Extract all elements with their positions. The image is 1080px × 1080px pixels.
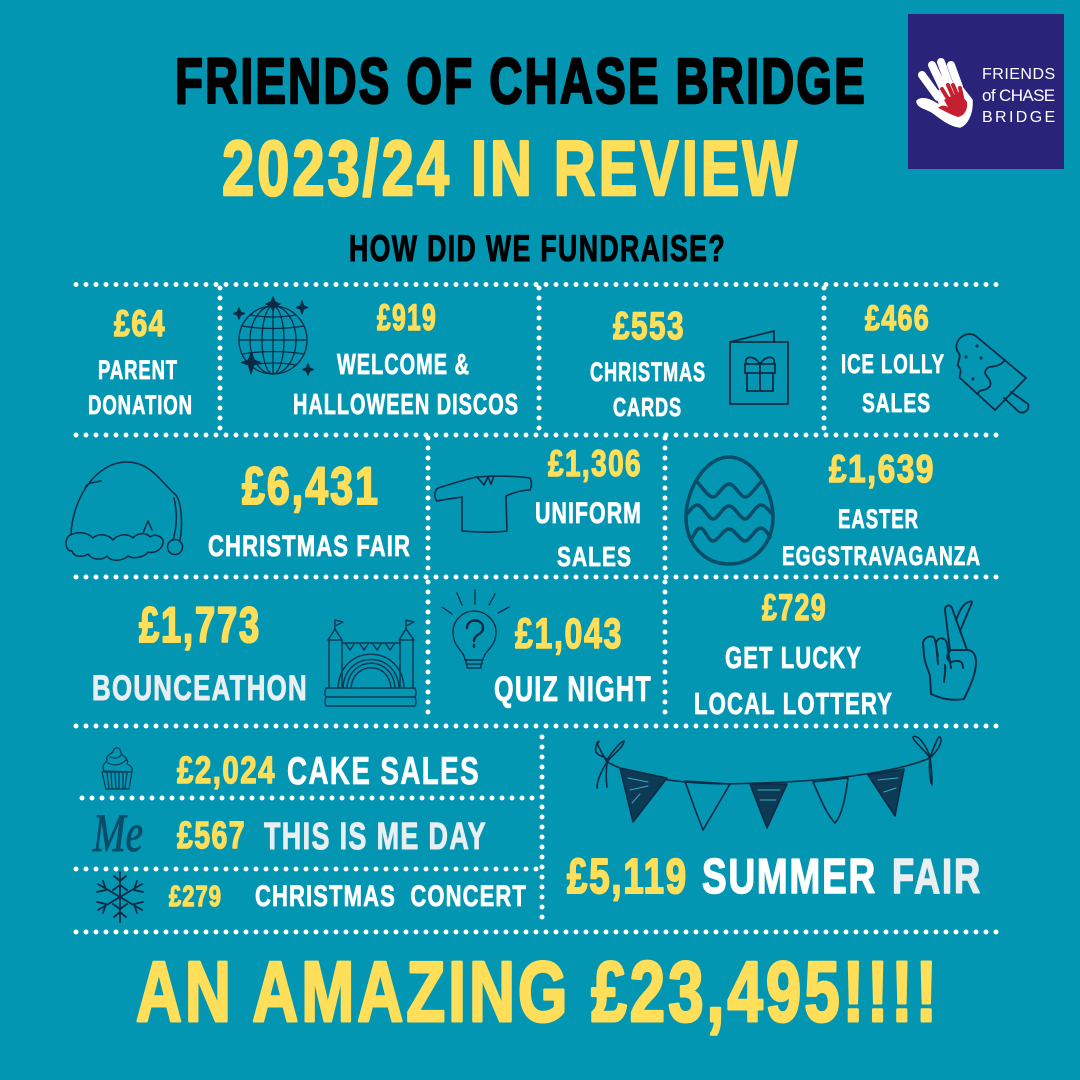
panel: this is me day: £567	[177, 815, 246, 857]
panel: christmas concert	[97, 872, 527, 922]
panel: summer fair: SUMMER	[702, 850, 877, 904]
icon: me script: Me	[92, 803, 143, 863]
panel: uniform sales: SALES	[557, 541, 632, 572]
panel: ice lolly sales: SALES	[862, 388, 931, 418]
panel: christmas fair: £6,431	[242, 457, 380, 516]
logo text: of CHASE	[982, 86, 1056, 105]
icon: snowflake	[97, 872, 143, 922]
panel: ice lolly sales: £466	[865, 299, 930, 338]
panel: uniform sales: UNIFORM	[535, 497, 642, 530]
panel: easter eggstravaganza: EASTER	[838, 504, 919, 534]
panel: easter eggstravaganza: EGGSTRAVAGANZA	[782, 541, 981, 571]
icon: easter egg	[686, 457, 773, 564]
panel: bounceathon: BOUNCEATHON	[92, 669, 308, 708]
panel: cake sales: £2,024	[177, 750, 276, 792]
panel: easter eggstravaganza	[686, 448, 981, 571]
panel: discos: WELCOME &	[337, 349, 470, 381]
panel: uniform sales: £1,306	[548, 443, 642, 484]
panel: parent donation	[88, 303, 193, 420]
panel: parent donation: DONATION	[88, 390, 193, 420]
icon: ice lolly	[956, 334, 1028, 413]
panel: christmas cards: CARDS	[613, 392, 682, 422]
panel: christmas fair	[66, 457, 411, 563]
panel: bounceathon: £1,773	[139, 597, 261, 653]
panel: this is me day: THIS IS ME DAY	[264, 816, 487, 858]
panel: uniform sales	[435, 443, 642, 572]
panel: discos: HALLOWEEN DISCOS	[293, 389, 519, 421]
panel: local lottery: LOCAL LOTTERY	[694, 686, 893, 721]
panel: parent donation: £64	[114, 303, 166, 344]
logo text	[982, 66, 1056, 126]
panel: quiz night: £1,043	[515, 610, 623, 658]
panel: discos	[234, 297, 519, 421]
panel: christmas cards: £553	[613, 305, 685, 348]
panel: christmas concert: CHRISTMAS CONCERT	[255, 880, 527, 913]
logo text: FRIENDS	[982, 66, 1056, 83]
icon: crossed fingers	[923, 601, 976, 700]
panel: christmas concert: £279	[169, 881, 222, 913]
icon: bouncy castle	[325, 620, 416, 706]
panel: bounceathon	[92, 597, 416, 708]
icon: gift card	[730, 331, 788, 404]
icon: cupcake	[102, 748, 132, 789]
panel: ice lolly sales	[841, 299, 1028, 418]
panel: ice lolly sales: ICE LOLLY	[841, 349, 945, 379]
section heading: HOW DID WE FUNDRAISE?	[349, 228, 726, 269]
icon: bunting	[596, 737, 941, 830]
panel: quiz night	[442, 590, 652, 709]
icon: sweater	[435, 476, 532, 532]
icon: white hand	[917, 62, 972, 127]
panel: discos: £919	[377, 297, 437, 338]
panel: parent donation: PARENT	[98, 355, 178, 385]
panel: christmas cards	[590, 305, 788, 422]
panel: quiz night: QUIZ NIGHT	[494, 670, 652, 709]
panel: local lottery	[694, 587, 976, 721]
logo	[908, 14, 1064, 169]
panel: local lottery: GET LUCKY	[725, 640, 862, 675]
panel: easter eggstravaganza: £1,639	[829, 448, 935, 491]
panel: cake sales	[102, 748, 480, 793]
icon: question bulb	[442, 590, 509, 668]
icon: santa hat	[66, 462, 182, 560]
panel: summer fair	[567, 737, 982, 904]
subtitle: 2023/24 IN REVIEW	[222, 124, 800, 212]
panel: cake sales: CAKE SALES	[287, 750, 480, 793]
panel: christmas fair: CHRISTMAS FAIR	[208, 530, 411, 563]
logo text: BRIDGE	[982, 109, 1056, 126]
panel: summer fair: FAIR	[892, 850, 982, 904]
panel: local lottery: £729	[762, 587, 827, 628]
panel: summer fair: £5,119	[567, 850, 688, 904]
icon: disco ball	[234, 297, 314, 375]
panel: this is me day	[92, 803, 487, 863]
panel: christmas cards: CHRISTMAS	[590, 357, 706, 387]
